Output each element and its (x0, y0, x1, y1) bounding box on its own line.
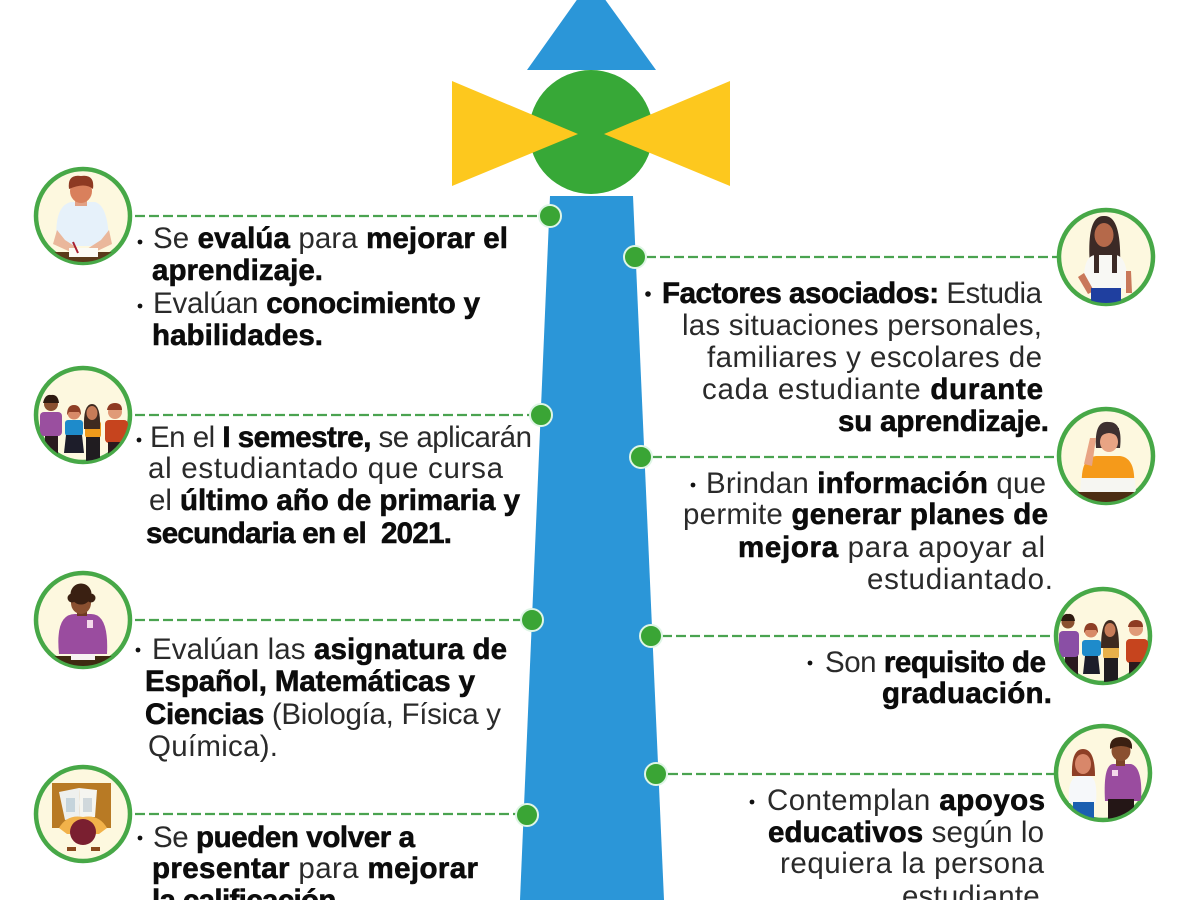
right yellow light beam (604, 81, 730, 186)
icon: group of four students (36, 368, 130, 463)
text block: left 2: el último año de primaria y (149, 484, 521, 517)
text block: right 4: educativos según lo (768, 816, 1044, 849)
icon: girl and boy standing (1056, 726, 1150, 821)
text block: right 2 (683, 467, 1053, 596)
text block: left 2: secundaria en el 2021. (146, 517, 452, 550)
text block: right 1: familiares y escolares de (707, 341, 1042, 374)
text block: left 1: Se evalúa para mejorar el (153, 222, 508, 255)
text block: right 2: permite generar planes de (683, 498, 1048, 531)
connector: right 1 (624, 246, 1058, 268)
text block: right 2: Brindan información que (706, 467, 1046, 500)
lighthouse illustration (452, 0, 730, 900)
connector: left 2 (135, 404, 552, 426)
text block: left 1 (138, 222, 508, 352)
connector: right 2 (630, 446, 1058, 468)
lighthouse tower (520, 196, 664, 900)
icon: girl with long hair (1059, 210, 1153, 304)
text block: left 3: Ciencias (Biología, Física y (145, 698, 501, 731)
text block: left 3: Evalúan las asignatura de (152, 633, 507, 666)
icon: group of four students (right) (1056, 589, 1150, 684)
text block: left 2: En el I semestre, se aplicarán (150, 421, 532, 454)
text block: right 4: Contemplan apoyos (767, 784, 1045, 817)
text block: left 3 (136, 633, 507, 763)
text block: left 3: Español, Matemáticas y (145, 665, 476, 698)
text block: left 4: presentar para mejorar (152, 852, 479, 885)
text block: right 1: las situaciones personales, (682, 309, 1042, 342)
text block: left 1: aprendizaje. (152, 254, 323, 287)
text block: right 1: su aprendizaje. (838, 405, 1049, 438)
icon: man writing at desk (36, 169, 130, 264)
text block: right 3 (808, 646, 1052, 710)
left yellow light beam (452, 81, 578, 186)
text block: left 1: Evalúan conocimiento y (153, 287, 481, 320)
connector: left 1 (135, 205, 561, 227)
text block: left 2 (137, 421, 532, 550)
connector: left 3 (135, 609, 543, 631)
text block: left 4 (138, 821, 479, 900)
text block: left 3: Química). (148, 730, 278, 763)
text block: right 4 (750, 784, 1048, 900)
lighthouse lantern circle (529, 70, 653, 194)
lighthouse roof triangle (527, 0, 656, 70)
text block: right 3: graduación. (882, 677, 1052, 710)
icon: student at desk seen from above (36, 767, 130, 861)
text block: right 4: requiera la persona (780, 847, 1045, 880)
text block: left 2: al estudiantado que cursa (148, 452, 504, 485)
connector: right 3 (640, 625, 1056, 647)
text block: right 3: Son requisito de (825, 646, 1046, 679)
connector: right 4 (645, 763, 1056, 785)
text block: right 2: estudiantado. (867, 563, 1053, 596)
text block: left 1: habilidades. (152, 319, 323, 352)
text block: right 1: cada estudiante durante (702, 373, 1043, 406)
connector: left 4 (135, 804, 538, 826)
icon: student thinking at desk (1059, 409, 1153, 504)
text block: right 1: Factores asociados: Estudia (662, 277, 1043, 310)
text block: left 4: Se pueden volver a (153, 821, 416, 854)
icon: student in purple shirt at desk (36, 573, 130, 668)
text block: right 2: mejora para apoyar al (738, 531, 1045, 564)
text block: right 1 (645, 277, 1049, 438)
